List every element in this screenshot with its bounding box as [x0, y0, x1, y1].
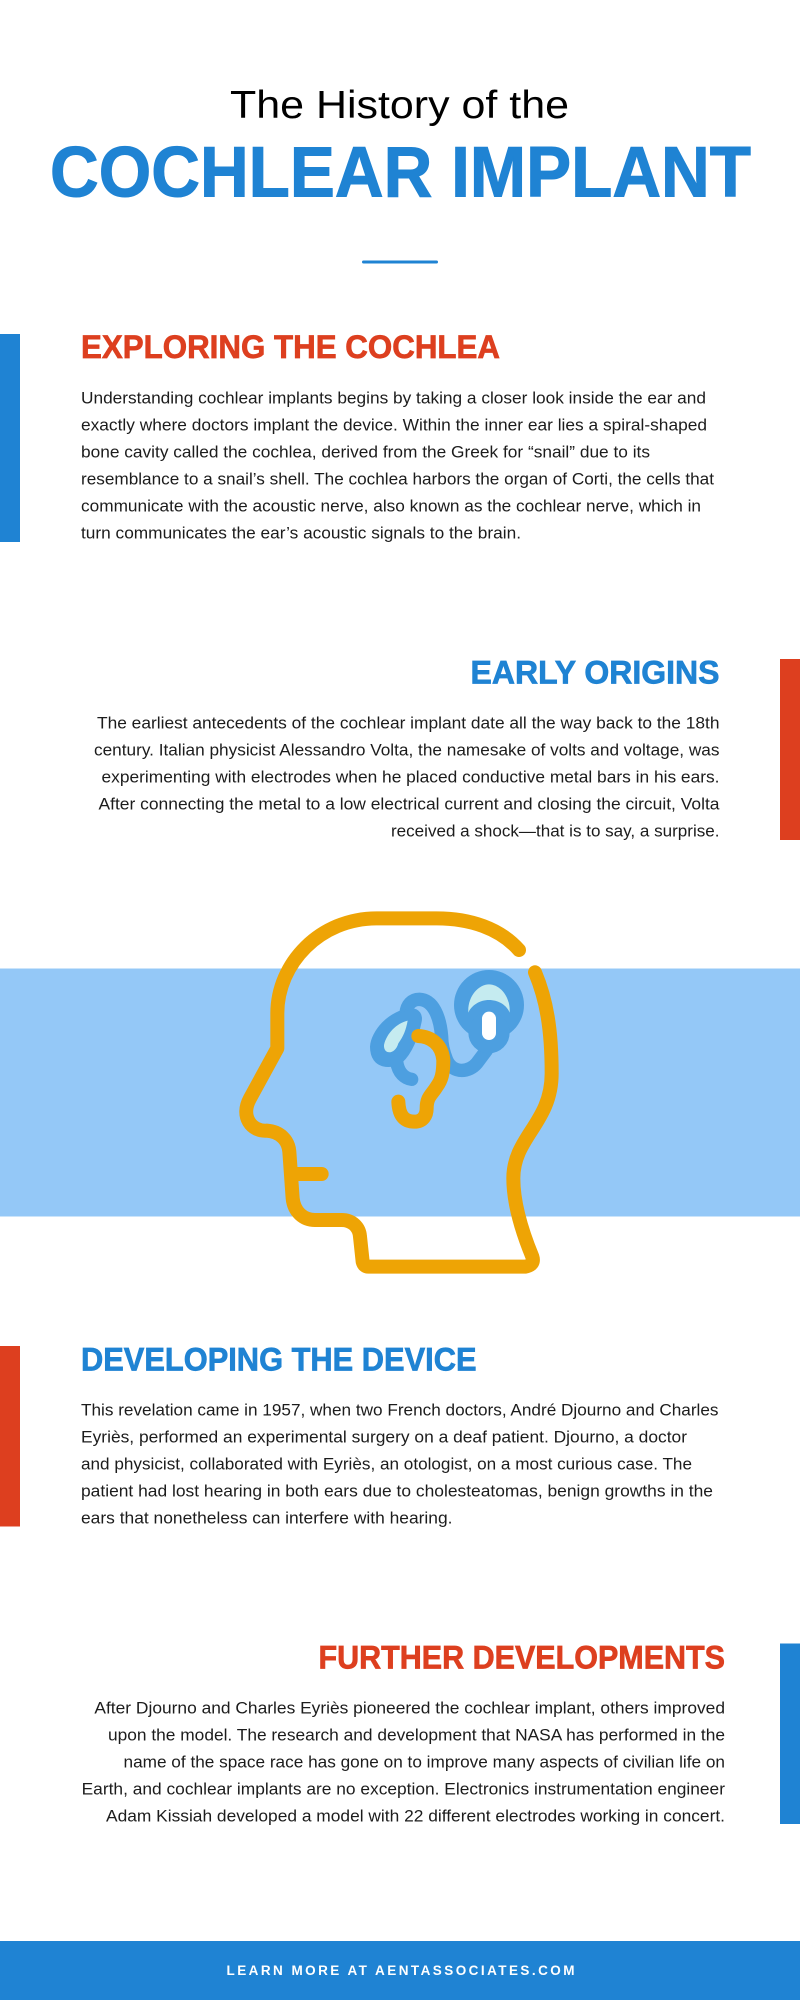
title: COCHLEAR IMPLANT — [50, 134, 751, 212]
icon: mouth — [292, 1153, 322, 1195]
body text: Earth, and cochlear implants are no exception. Electronics instrumentation engineer — [82, 1780, 726, 1798]
title divider — [362, 260, 438, 264]
body text — [82, 1699, 726, 1826]
accent bar — [0, 1346, 20, 1526]
accent bar — [0, 334, 20, 542]
icon: head outline — [246, 918, 552, 1267]
body text: resemblance to a snail’s shell. The cochlea harbors the organ of Corti, the cells that — [81, 470, 714, 488]
body text: name of the space race has gone on to improve many aspects of civilian life on — [124, 1753, 725, 1771]
icon: external processor — [371, 1009, 421, 1079]
body text: After Djourno and Charles Eyriès pioneered the cochlear implant, others improved — [94, 1699, 725, 1717]
body text: communicate with the acoustic nerve, also known as the cochlear nerve, which in — [81, 497, 701, 515]
light blue band — [0, 968, 800, 1216]
icon: ear — [398, 1036, 443, 1122]
body text — [94, 714, 720, 840]
accent bar — [780, 659, 800, 840]
panel: exploring the cochlea — [0, 329, 714, 542]
body text: After connecting the metal to a low electrical current and closing the circuit, Volta — [98, 795, 720, 813]
body text: Eyriès, performed an experimental surgery on a deaf patient. Djourno, a doctor — [81, 1429, 688, 1447]
body text — [81, 389, 714, 542]
title — [50, 84, 751, 212]
heading: DEVELOPING THE DEVICE — [81, 1342, 476, 1378]
heading: EARLY ORIGINS — [470, 654, 720, 690]
title: The History of the — [230, 84, 569, 127]
footer — [0, 1941, 800, 2000]
heading: EXPLORING THE COCHLEA — [81, 329, 500, 365]
footer text: LEARN MORE AT AENTASSOCIATES.COM — [226, 1963, 574, 1978]
body text — [81, 1402, 718, 1528]
body text: experimenting with electrodes when he placed conductive metal bars in his ears. — [102, 768, 720, 786]
body text: This revelation came in 1957, when two French doctors, André Djourno and Charles — [81, 1402, 718, 1420]
panel: early origins — [94, 654, 800, 840]
body text: century. Italian physicist Alessandro Volta, the namesake of volts and voltage, was — [94, 741, 720, 759]
body text: and physicist, collaborated with Eyriès, an otologist, on a most curious case. The — [81, 1456, 692, 1474]
body text: patient had lost hearing in both ears due to cholesteatomas, benign growths in the — [81, 1483, 713, 1501]
body text: Adam Kissiah developed a model with 22 different electrodes working in concert. — [106, 1808, 725, 1826]
body text: Understanding cochlear implants begins by taking a closer look inside the ear and — [81, 389, 706, 407]
body text: turn communicates the ear’s acoustic signals to the brain. — [81, 524, 521, 542]
accent bar — [780, 1644, 800, 1824]
icon: magnet receiver — [454, 970, 524, 1053]
panel: developing the device — [0, 1342, 718, 1528]
body text: received a shock—that is to say, a surprise. — [391, 822, 720, 840]
body text: ears that nonetheless can interfere with hearing. — [81, 1510, 453, 1528]
body text: exactly where doctors implant the device. Within the inner ear lies a spiral-shaped — [81, 416, 707, 434]
body text: The earliest antecedents of the cochlear implant date all the way back to the 18th — [97, 714, 720, 732]
panel: further developments — [82, 1640, 800, 1826]
body text: upon the model. The research and development that NASA has performed in the — [108, 1726, 725, 1744]
icon: implant wire — [406, 999, 487, 1070]
heading: FURTHER DEVELOPMENTS — [318, 1640, 725, 1676]
icon: head with cochlear implant — [246, 918, 552, 1267]
body text: bone cavity called the cochlea, derived from the Greek for “snail” due to its — [81, 443, 650, 461]
